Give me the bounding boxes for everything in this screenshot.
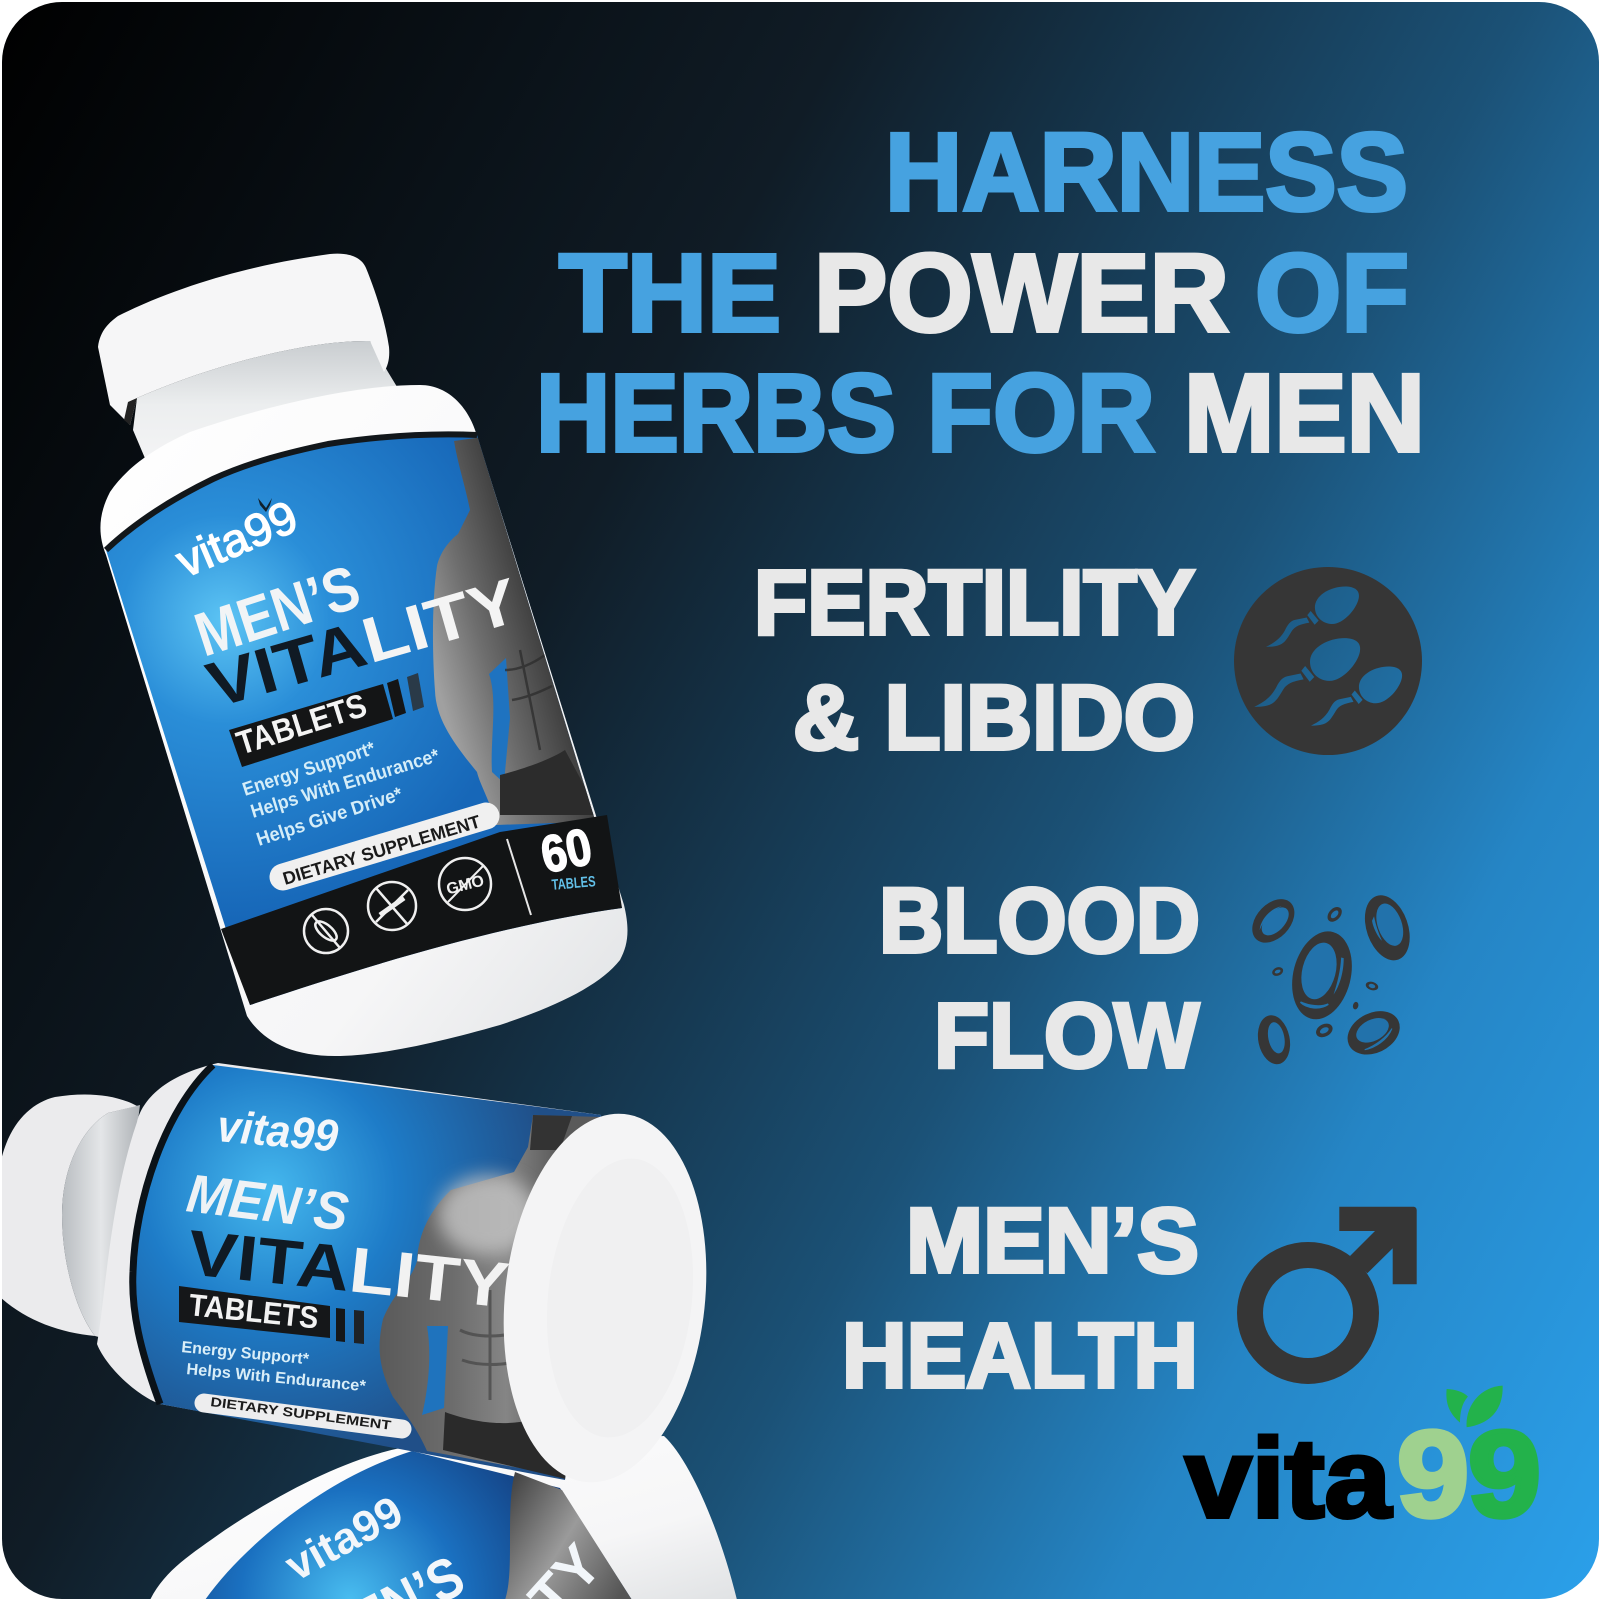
bottle: upper tilted xyxy=(98,254,640,1056)
headline: MEN xyxy=(1184,352,1425,475)
benefit: men's health: HEALTH xyxy=(842,1305,1198,1407)
bottle: sideways: MEN’S xyxy=(184,1163,352,1243)
bottle: sideways: vita99 xyxy=(215,1100,340,1162)
bottle base disc xyxy=(504,1114,706,1476)
bottle: bottom cropped: vita99 xyxy=(277,1487,411,1591)
headline xyxy=(536,111,1425,475)
bottle: bottom cropped xyxy=(150,1436,737,1600)
bottle: upper tilted: DIETARY SUPPLEMENT xyxy=(280,811,483,889)
headline: POWER xyxy=(814,232,1229,355)
man figure xyxy=(380,1115,600,1479)
icon: blood cells xyxy=(1244,889,1418,1067)
icon: sperm cells in circle xyxy=(1234,567,1422,755)
bottle: upper tilted: VITALITY xyxy=(199,564,526,721)
bottle: sideways: DIETARY SUPPLEMENT xyxy=(210,1394,392,1433)
bottle: sideways xyxy=(0,1063,724,1492)
label xyxy=(132,1065,601,1480)
benefit: blood flow: BLOOD xyxy=(879,870,1200,972)
logo: vita99: 9 xyxy=(1468,1406,1541,1542)
benefit: fertility and libido: & LIBIDO xyxy=(793,667,1195,769)
headline: THE xyxy=(559,232,781,355)
logo: vita99: 9 xyxy=(1397,1406,1469,1542)
icon: no gmo: GMO xyxy=(445,873,486,898)
bottle: sideways: Helps With Endurance* xyxy=(186,1361,367,1395)
label xyxy=(106,434,622,1005)
man figure xyxy=(432,438,594,825)
benefit: men's health xyxy=(842,1190,1199,1407)
bottle: sideways: TABLETS xyxy=(187,1287,320,1336)
benefit: fertility and libido: FERTILITY xyxy=(754,552,1195,654)
headline: HERBS xyxy=(536,352,896,475)
bottle: upper tilted: Energy Support* xyxy=(240,738,378,801)
logo: vita99: vita xyxy=(1185,1416,1392,1541)
bottle: upper tilted: TABLETS xyxy=(232,686,371,762)
bottle: upper tilted: TABLES xyxy=(551,873,596,894)
icon: no gmo xyxy=(439,858,491,910)
label text: vita99 xyxy=(169,490,305,587)
headline: OF xyxy=(1255,232,1409,355)
bottle: upper tilted: Helps Give Drive* xyxy=(254,784,406,851)
bottle: sideways: VITALITY xyxy=(185,1216,512,1322)
black band xyxy=(221,815,622,1005)
bottle: sideways: Energy Support* xyxy=(181,1339,310,1368)
bottle: upper tilted: Helps With Endurance* xyxy=(248,745,442,823)
bottle: upper tilted: 60 xyxy=(536,818,597,885)
icon: no hormones xyxy=(368,882,416,930)
headline: FOR xyxy=(927,352,1155,475)
icon: no gluten xyxy=(304,909,348,953)
bottle: upper tilted: MEN’S xyxy=(187,553,368,670)
benefit: fertility and libido xyxy=(754,552,1195,769)
icon: male symbol xyxy=(1250,1207,1417,1371)
benefit: blood flow: FLOW xyxy=(934,985,1199,1087)
logo: vita99 xyxy=(1185,1386,1541,1542)
benefit: men's health: MEN’S xyxy=(906,1190,1199,1292)
benefit: blood flow xyxy=(879,870,1200,1087)
headline: HARNESS xyxy=(885,111,1408,234)
